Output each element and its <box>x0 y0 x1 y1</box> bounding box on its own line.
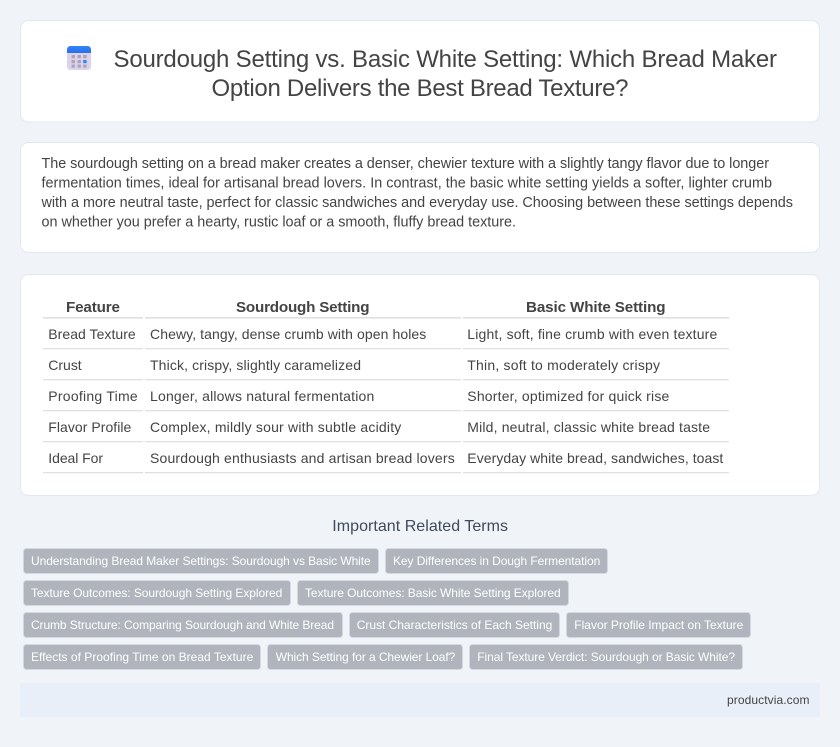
table row: crust <box>48 357 660 373</box>
table row: proofing time: Longer, allows natural fermentation <box>150 388 374 404</box>
table row: crust: Thin, soft to moderately crispy <box>467 357 660 373</box>
table row: proofing time: Proofing Time <box>48 388 138 404</box>
title <box>114 46 777 102</box>
table row: ideal for: Ideal For <box>48 450 103 466</box>
intro text: fermentation times, ideal for artisanal bread lovers. In contrast, the basic white setting yields a softer, lighter crumb <box>42 176 772 192</box>
table row: ideal for <box>48 450 723 466</box>
table row: proofing time <box>48 388 670 404</box>
related term tags: Final Texture Verdict: Sourdough or Basic White? <box>477 650 735 664</box>
table header: Feature <box>66 299 120 316</box>
table row: proofing time: Shorter, optimized for quick rise <box>467 388 670 404</box>
related term tags: Texture Outcomes: Basic White Setting Explored <box>305 586 561 600</box>
related term tags: Effects of Proofing Time on Bread Texture <box>31 650 254 664</box>
related term tags: Flavor Profile Impact on Texture <box>574 618 744 632</box>
table header: Basic White Setting <box>526 299 666 316</box>
title: Sourdough Setting vs. Basic White Setting: Which Bread Maker <box>114 46 777 73</box>
table row: flavor profile: Mild, neutral, classic white bread taste <box>467 419 710 435</box>
panel: comparison table <box>20 274 820 496</box>
table row: bread texture: Chewy, tangy, dense crumb with open holes <box>150 326 426 342</box>
related term tags: Key Differences in Dough Fermentation <box>393 554 600 568</box>
related term tags: Crust Characteristics of Each Setting <box>357 618 552 632</box>
intro text: on whether you prefer a hearty, rustic loaf or a smooth, fluffy bread texture. <box>42 214 516 230</box>
table header: Sourdough Setting <box>236 299 370 316</box>
table row: ideal for: Sourdough enthusiasts and artisan bread lovers <box>150 450 455 466</box>
table row: bread texture <box>48 326 718 342</box>
panel: intro paragraph <box>20 142 820 252</box>
related term tags <box>24 548 750 670</box>
footer source: productvia.com <box>727 693 810 707</box>
related term tags: Texture Outcomes: Sourdough Setting Explored <box>31 586 282 600</box>
table row: crust: Thick, crispy, slightly caramelized <box>150 357 361 373</box>
intro text: The sourdough setting on a bread maker creates a denser, chewier texture with a slightly tangy flavor due to longer <box>42 156 769 172</box>
related term tags: Crumb Structure: Comparing Sourdough and White Bread <box>31 618 334 632</box>
table row: crust: Crust <box>48 357 82 373</box>
icon: calendar <box>67 46 91 70</box>
table row: flavor profile: Complex, mildly sour with subtle acidity <box>150 419 401 435</box>
table row: bread texture: Light, soft, fine crumb with even texture <box>467 326 718 342</box>
heading: important related terms: Important Related Terms <box>332 518 508 535</box>
table row: flavor profile <box>48 419 710 435</box>
intro text: with a more neutral taste, perfect for classic sandwiches and everyday use. Choosing between these settings depends <box>40 195 793 211</box>
related term tags: Which Setting for a Chewier Loaf? <box>276 650 456 664</box>
intro text <box>40 156 793 230</box>
table row: flavor profile: Flavor Profile <box>48 419 132 435</box>
panel: title header <box>20 20 820 122</box>
table row: ideal for: Everyday white bread, sandwiches, toast <box>467 450 723 466</box>
table header <box>66 299 666 316</box>
title: Option Delivers the Best Bread Texture? <box>212 75 628 102</box>
footer bar <box>20 683 820 717</box>
related term tags: Understanding Bread Maker Settings: Sourdough vs Basic White <box>31 554 371 568</box>
table row: bread texture: Bread Texture <box>48 326 136 342</box>
